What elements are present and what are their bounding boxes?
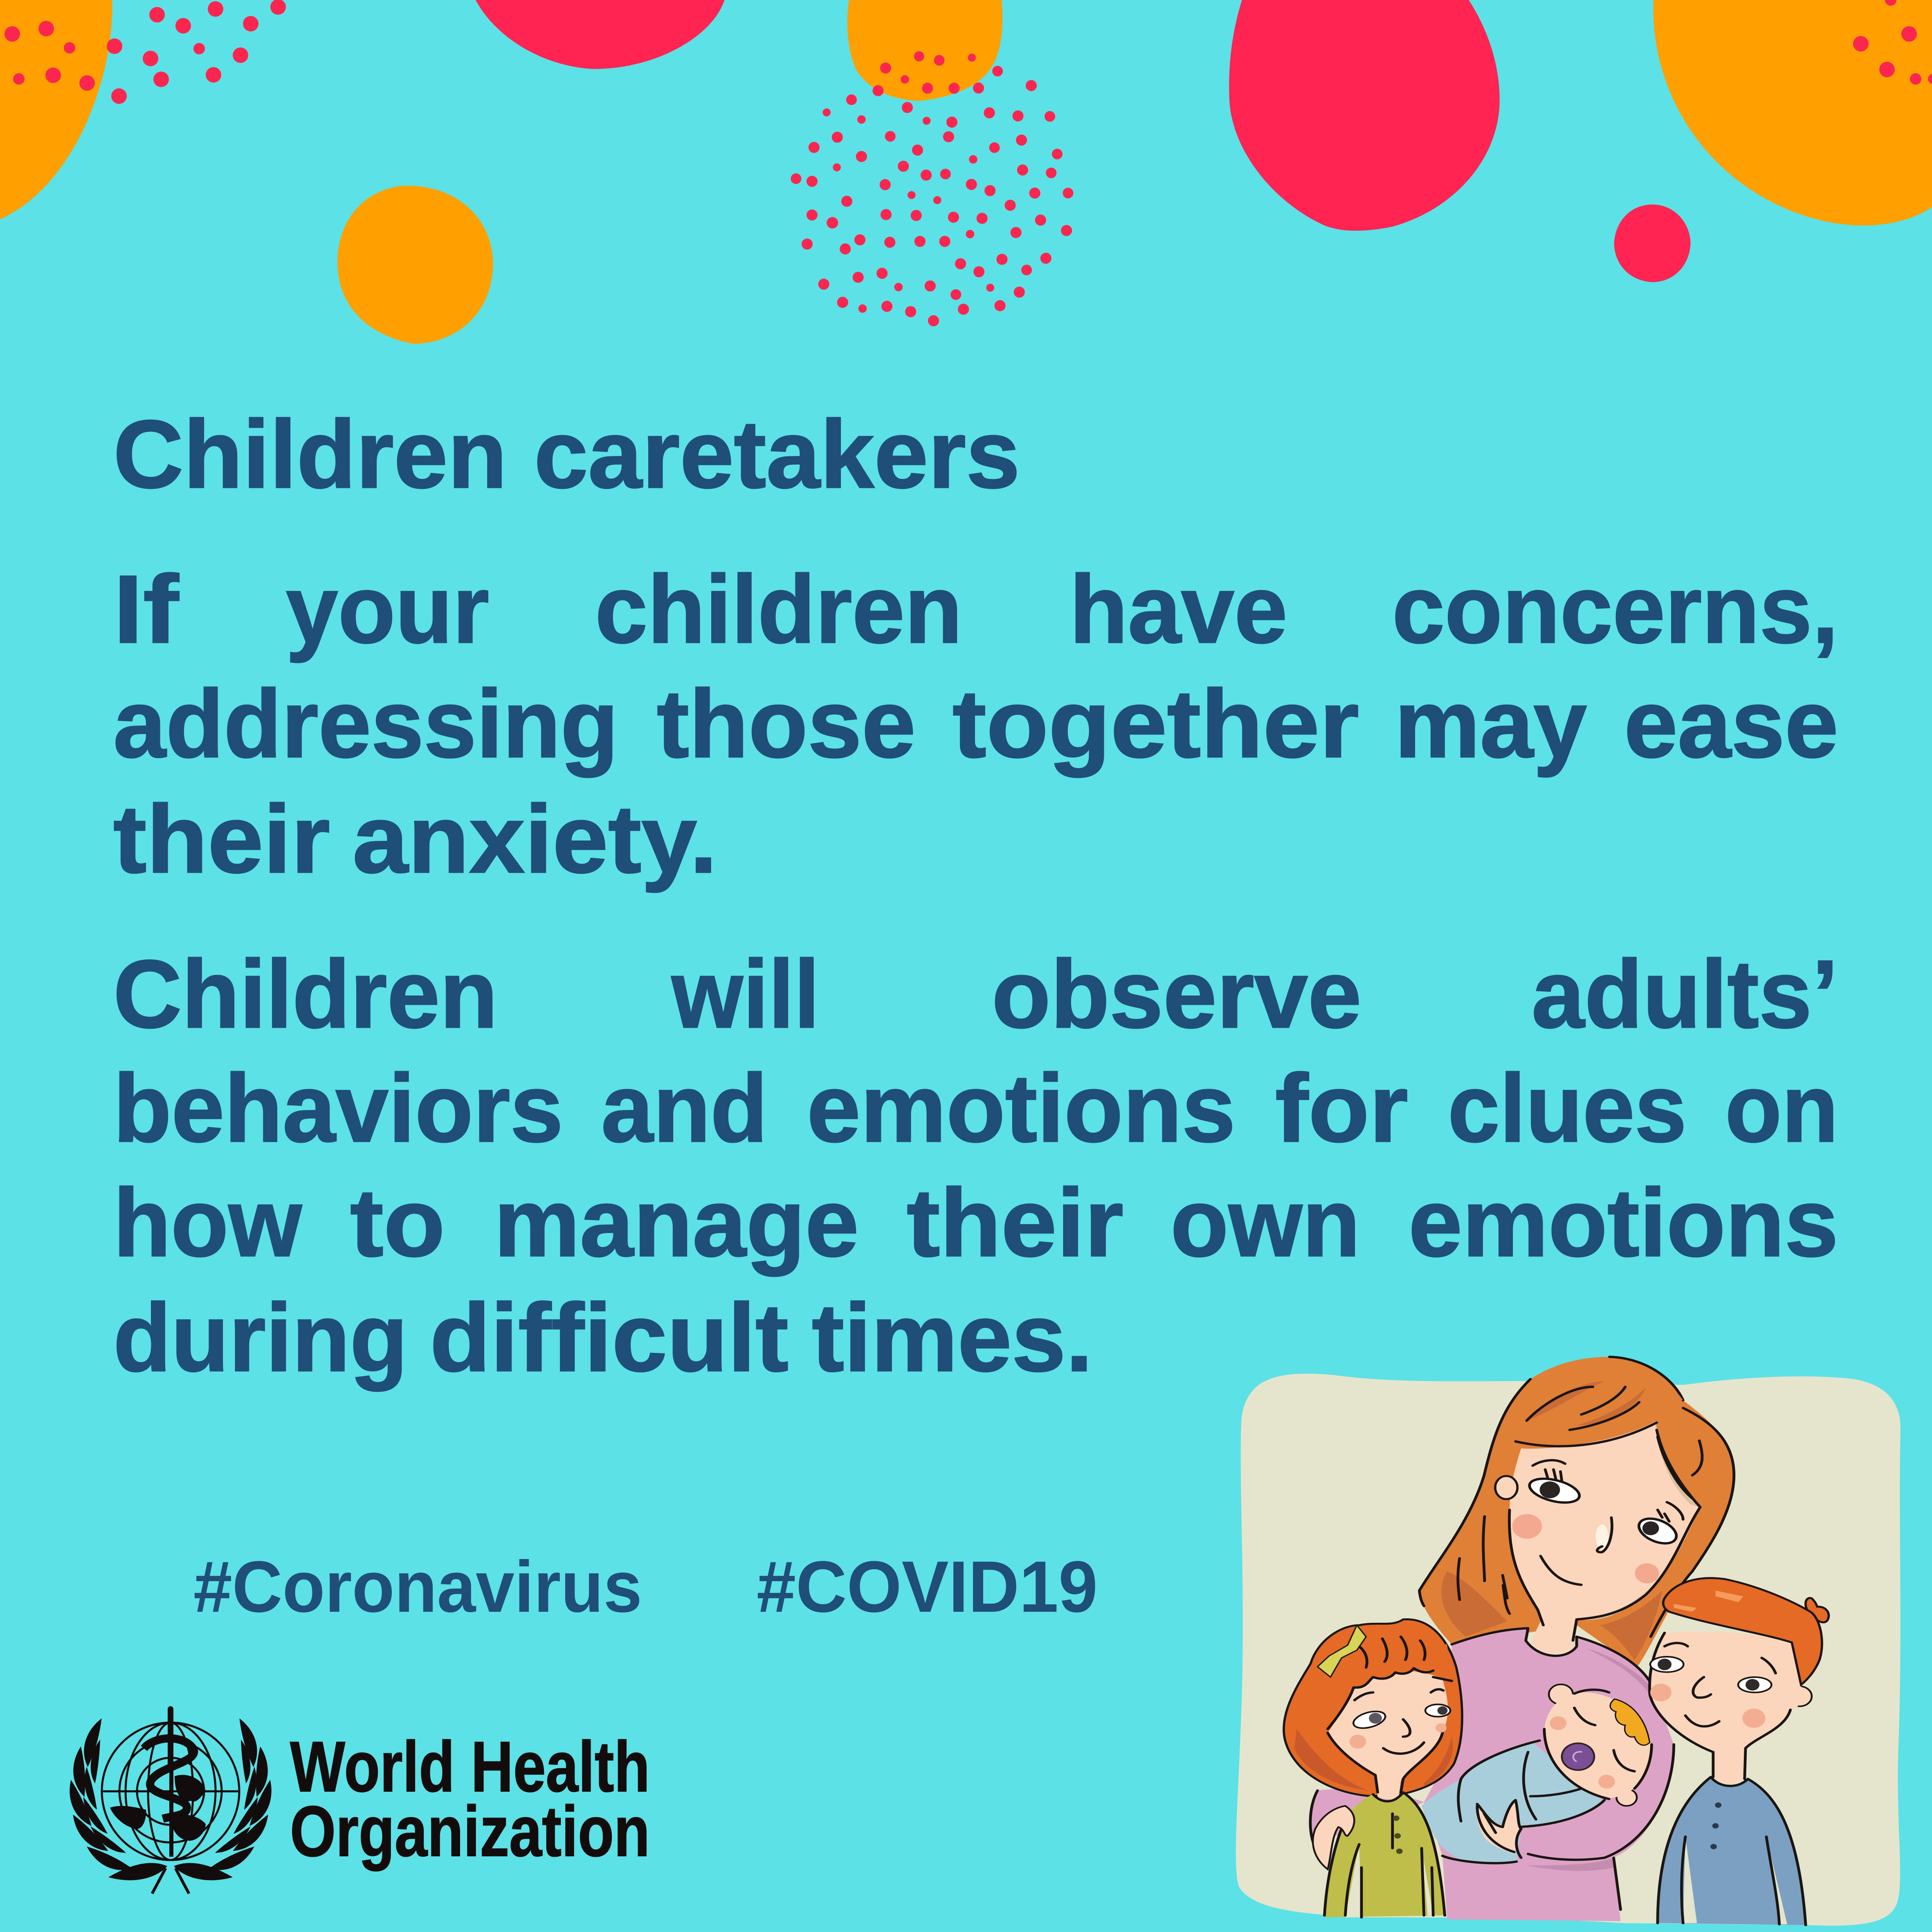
dot cluster: center	[791, 51, 1074, 326]
paragraph: concerns: children	[595, 555, 962, 663]
paragraph: observing adults: during	[113, 1284, 408, 1392]
paragraph: observing adults: own	[1170, 1169, 1360, 1277]
decorative blobs	[0, 0, 1932, 344]
mother	[1419, 1357, 1734, 1667]
baby	[1544, 1685, 1652, 1806]
paragraph: concerns: have	[1069, 555, 1287, 663]
paragraph: concerns: their	[113, 785, 330, 893]
paragraph: concerns: may	[1395, 670, 1587, 778]
girl	[1284, 1619, 1462, 1917]
paragraph: observing adults: will	[671, 940, 820, 1048]
paragraph: concerns: concerns,	[1392, 555, 1838, 663]
paragraph: observing adults: emotions	[807, 1054, 1236, 1162]
logo wordmark: Organization	[290, 1792, 650, 1871]
paragraph: observing adults: clues	[1448, 1054, 1687, 1162]
paragraph: observing adults: emotions	[1409, 1169, 1838, 1277]
logo wordmark	[290, 1727, 650, 1871]
paragraph: observing adults: observe	[992, 940, 1361, 1048]
cream background panel	[1236, 1374, 1901, 1925]
hashtags: #COVID19	[757, 1546, 1098, 1627]
paragraph: observing adults: on	[1725, 1054, 1838, 1162]
paragraph: concerns	[113, 555, 1838, 893]
paragraph: concerns: If	[113, 555, 180, 663]
icon: WHO emblem	[67, 1706, 274, 1894]
paragraph: concerns: anxiety.	[353, 785, 717, 893]
paragraph: observing adults: behaviors	[113, 1054, 563, 1162]
paragraph: observing adults: times.	[812, 1284, 1093, 1392]
paragraph: concerns: addressing	[113, 670, 618, 778]
logo wordmark: World Health	[290, 1727, 650, 1807]
paragraph: observing adults: to	[350, 1169, 445, 1277]
paragraph: observing adults: how	[113, 1169, 302, 1277]
paragraph: observing adults	[113, 940, 1838, 1392]
paragraph: observing adults: difficult	[430, 1284, 789, 1392]
paragraph: observing adults: adults’	[1532, 940, 1838, 1048]
paragraph: concerns: your	[286, 555, 489, 663]
illustration: mother with children	[1236, 1357, 1901, 1925]
WHO logo	[67, 1706, 650, 1894]
paragraph: observing adults: manage	[494, 1169, 859, 1277]
hashtags	[193, 1546, 1098, 1627]
dot cluster: top left	[4, 0, 286, 104]
dot cluster: top right	[1853, 0, 1932, 85]
paragraph: concerns: together	[953, 670, 1359, 778]
hashtags: #Coronavirus	[193, 1546, 642, 1627]
paragraph: concerns: those	[657, 670, 916, 778]
paragraph: observing adults: for	[1275, 1054, 1408, 1162]
paragraph: observing adults: and	[601, 1054, 768, 1162]
boy	[1649, 1578, 1829, 1925]
paragraph: observing adults: Children	[113, 940, 498, 1048]
paragraph: observing adults: their	[907, 1169, 1123, 1277]
mother's sweater and holding arm	[1310, 1628, 1674, 1921]
paragraph: concerns: ease	[1624, 670, 1838, 778]
title: Children caretakers	[113, 400, 1020, 508]
